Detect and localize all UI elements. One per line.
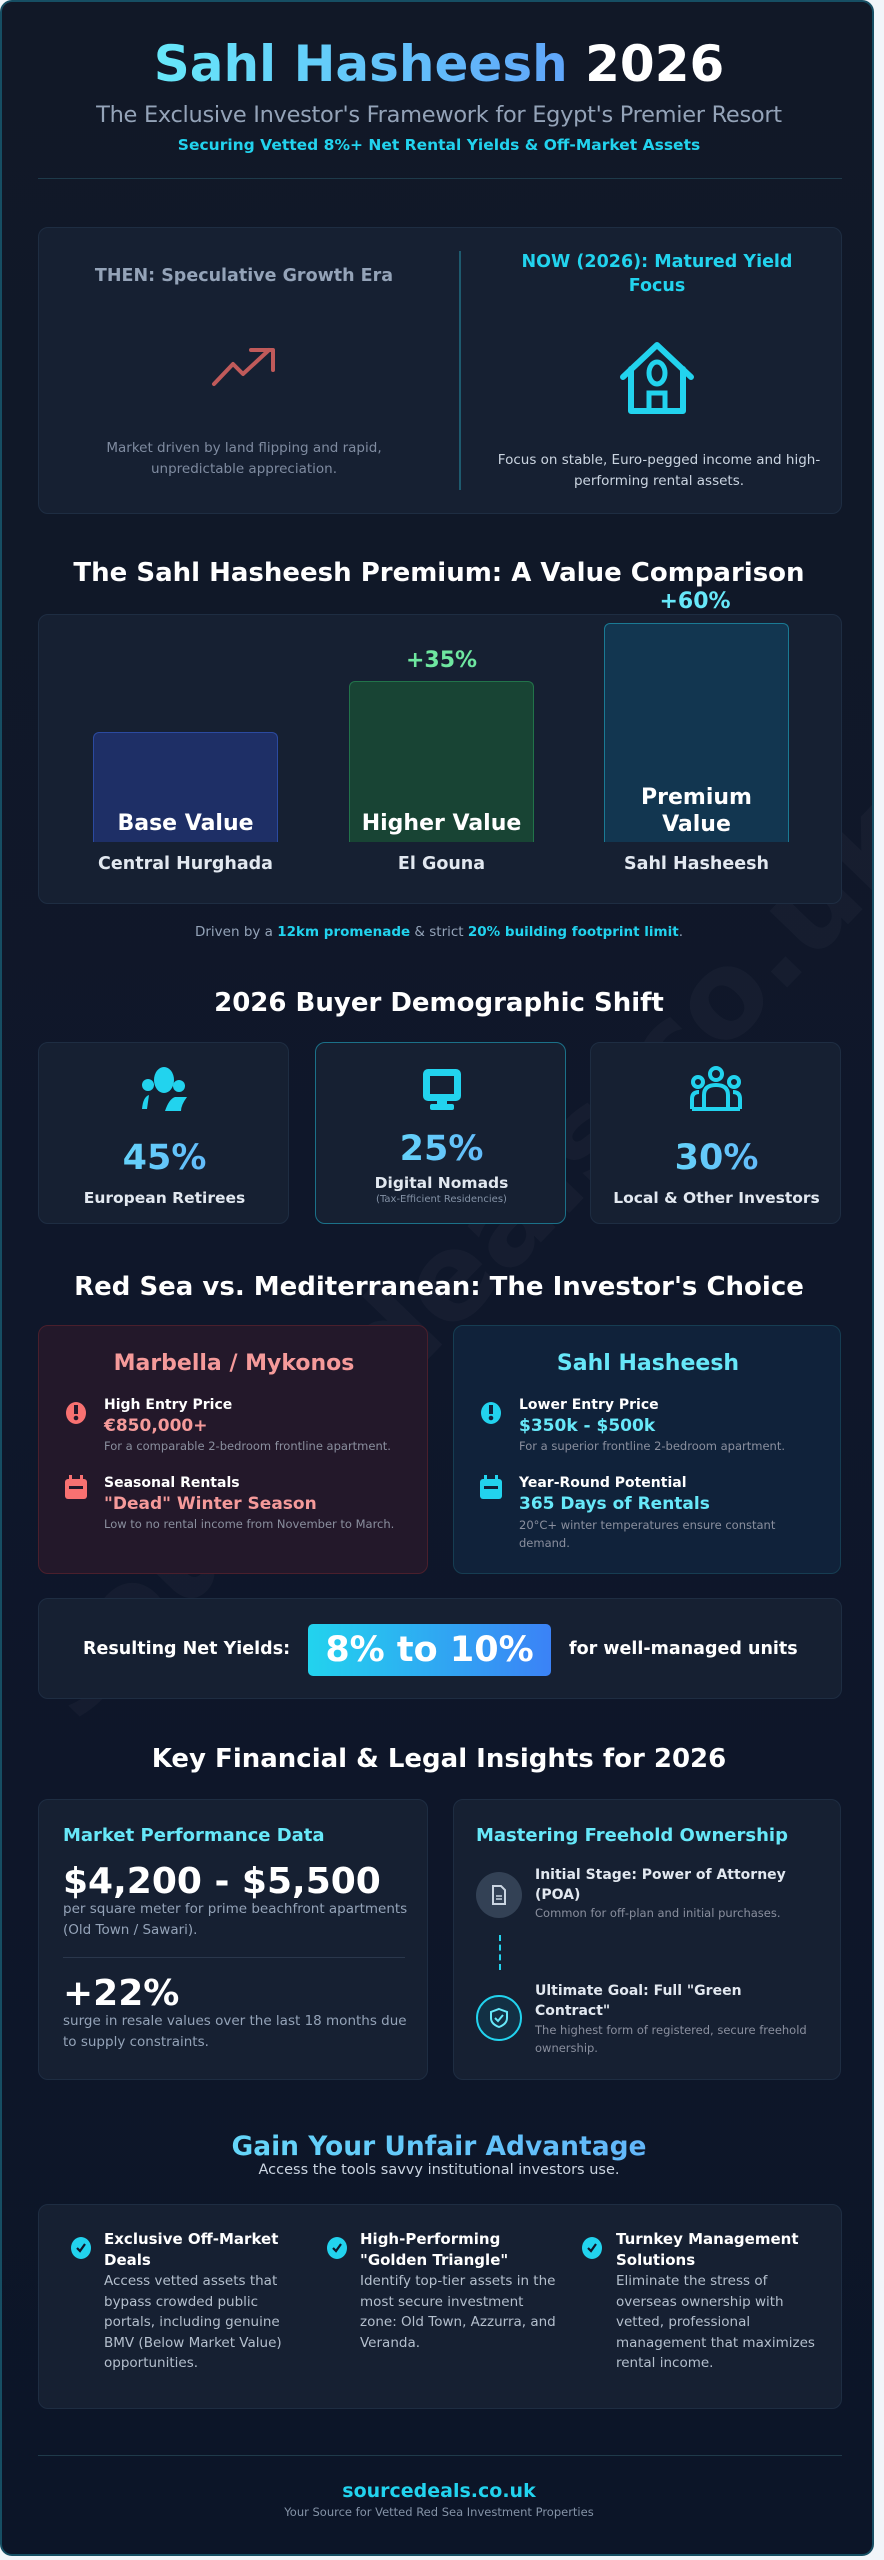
category labels: El Gouna: [398, 854, 485, 874]
title: Sahl Hasheesh 2026: [154, 35, 724, 93]
item: year-round: 365 Days of Rentals: [519, 1494, 710, 1514]
then heading: THEN: Speculative Growth Era: [95, 266, 393, 286]
item: golden triangle: Identify top-tier assets in the most secure investment zone: Old Town, Azzurra, and Veranda.: [360, 2273, 556, 2350]
item: golden triangle: High-Performing "Golden Triangle": [360, 2230, 508, 2268]
bar: sahl hasheesh: Value: [662, 812, 731, 837]
now heading: NOW (2026): Matured Yield Focus: [522, 252, 792, 296]
item: year-round: [480, 1475, 776, 1550]
bar chart panel: [38, 614, 842, 904]
panel: sahl hasheesh: Sahl Hasheesh: [557, 1351, 739, 1376]
panel: sahl hasheesh: [453, 1325, 841, 1574]
icon: group: [690, 1066, 742, 1111]
item: year-round: 20°C+ winter temperatures ensure constant demand.: [519, 1518, 775, 1550]
item: high entry: For a comparable 2-bedroom frontline apartment.: [104, 1439, 391, 1453]
stat 45%: 45%: [123, 1138, 206, 1178]
card: local investors: [590, 1042, 841, 1224]
panel: market performance: [38, 1799, 428, 2080]
footer: [284, 2480, 594, 2519]
heading: unfair advantage: [2, 2130, 876, 2164]
stat 30%: 30%: [675, 1138, 758, 1178]
item: turnkey: Turnkey Management Solutions: [616, 2230, 798, 2268]
yield banner: Resulting Net Yields:: [83, 1639, 290, 1659]
label: +60%: +60%: [659, 589, 731, 614]
item: high entry: High Entry Price: [104, 1397, 232, 1413]
heading: unfair advantage: Gain Your Unfair Advantage: [231, 2131, 647, 2162]
tagline: Securing Vetted 8%+ Net Rental Yields & Off-Market Assets: [178, 136, 700, 154]
card: european retirees: European Retirees: [84, 1189, 245, 1207]
item: seasonal: Seasonal Rentals: [104, 1475, 240, 1491]
item: off-market: Access vetted assets that bypass crowded public portals, including genuine BMV (Below Market Value) opportunities.: [104, 2273, 282, 2371]
panel: market performance: per square meter for prime beachfront apartments (Old Town / Sawari).: [63, 1901, 407, 1938]
step: green contract: The highest form of registered, secure freehold ownership.: [535, 2023, 807, 2055]
stat +22%: +22%: [63, 1973, 179, 2014]
stat 25%: 25%: [400, 1129, 483, 1169]
subtitle: The Exclusive Investor's Framework for Egypt's Premier Resort: [96, 102, 782, 128]
panel: market performance: surge in resale values over the last 18 months due to supply constraints.: [63, 2013, 407, 2050]
panel: then vs now: [38, 227, 842, 514]
item: lower entry: $350k - $500k: [519, 1416, 655, 1436]
card: european retirees: [38, 1042, 289, 1224]
bar: el gouna: Higher Value: [362, 811, 521, 836]
icon: house: [620, 342, 694, 414]
category labels: [98, 854, 769, 874]
item: lower entry: Lower Entry Price: [519, 1397, 659, 1413]
footer: sourcedeals.co.uk: [342, 2480, 536, 2502]
item: high entry: [66, 1397, 391, 1453]
icon: monitor: [423, 1069, 461, 1110]
item: seasonal: Low to no rental income from November to March.: [104, 1517, 394, 1531]
panel: marbella: [38, 1325, 428, 1574]
card: digital nomads: Digital Nomads: [375, 1174, 508, 1192]
heading: red sea vs med: Red Sea vs. Mediterranean: The Investor's Choice: [74, 1272, 804, 1302]
bar: el gouna: [349, 681, 534, 842]
panel: advantages: [38, 2204, 842, 2409]
step: green contract: [476, 1983, 807, 2055]
caption: Driven by a 12km promenade & strict 20% building footprint limit.: [195, 924, 683, 940]
item: year-round: Year-Round Potential: [519, 1475, 687, 1491]
item: lower entry: [481, 1397, 785, 1453]
pill: 8% to 10%: 8% to 10%: [325, 1630, 534, 1670]
now text: Focus on stable, Euro-pegged income and high-performing rental assets.: [498, 452, 820, 489]
stat 25%: [316, 1127, 567, 1171]
bar: central hurghada: [93, 732, 278, 842]
step: POA: Common for off-plan and initial purchases.: [535, 1906, 781, 1920]
item: off-market: [71, 2230, 282, 2371]
step: POA: [476, 1867, 786, 1920]
item: off-market: Exclusive Off-Market Deals: [104, 2230, 278, 2268]
panel: freehold: [453, 1799, 841, 2080]
bar: central hurghada: Base Value: [117, 811, 254, 836]
item: seasonal: [65, 1475, 394, 1531]
heading: demographic: 2026 Buyer Demographic Shift: [214, 988, 664, 1018]
item: seasonal: "Dead" Winter Season: [104, 1494, 317, 1514]
footer: Your Source for Vetted Red Sea Investment Properties: [284, 2505, 594, 2519]
card: local investors: Local & Other Investors: [613, 1189, 820, 1207]
card: digital nomads: (Tax-Efficient Residencies): [376, 1194, 507, 1205]
step: green contract: Ultimate Goal: Full "Green Contract": [535, 1983, 742, 2019]
stat price: $4,200 - $5,500: [63, 1861, 381, 1902]
category labels: Sahl Hasheesh: [624, 854, 769, 874]
bar: sahl hasheesh: Premium: [641, 785, 752, 810]
text: Access the tools savvy institutional investors use.: [259, 2162, 619, 2178]
heading: key insights: Key Financial & Legal Insights for 2026: [152, 1744, 726, 1774]
card: digital nomads: [315, 1042, 566, 1224]
bar: sahl hasheesh: [604, 623, 789, 842]
panel: freehold: Mastering Freehold Ownership: [476, 1825, 788, 1846]
category labels: Central Hurghada: [98, 854, 273, 874]
item: lower entry: For a superior frontline 2-bedroom apartment.: [519, 1439, 785, 1453]
item: high entry: €850,000+: [104, 1416, 208, 1436]
stat 45%: [39, 1136, 290, 1180]
panel: market performance: Market Performance Data: [63, 1825, 325, 1846]
item: turnkey: [582, 2230, 815, 2371]
then text: Market driven by land flipping and rapid, unpredictable appreciation.: [106, 440, 382, 477]
label: +35%: +35%: [406, 648, 477, 673]
step: POA: Initial Stage: Power of Attorney (POA): [535, 1867, 786, 1903]
stat 30%: [591, 1136, 842, 1180]
panel: marbella: Marbella / Mykonos: [114, 1351, 354, 1376]
item: turnkey: Eliminate the stress of overseas ownership with vetted, professional management that maximizes rental income.: [616, 2273, 815, 2371]
item: golden triangle: [327, 2230, 556, 2350]
heading: value comparison: The Sahl Hasheesh Premium: A Value Comparison: [73, 558, 805, 588]
yield banner: for well-managed units: [569, 1639, 798, 1659]
pill: 8% to 10%: [308, 1624, 551, 1676]
yield banner: [38, 1598, 842, 1699]
icon: retirees: [142, 1067, 187, 1111]
icon: trend arrow: [212, 348, 275, 386]
